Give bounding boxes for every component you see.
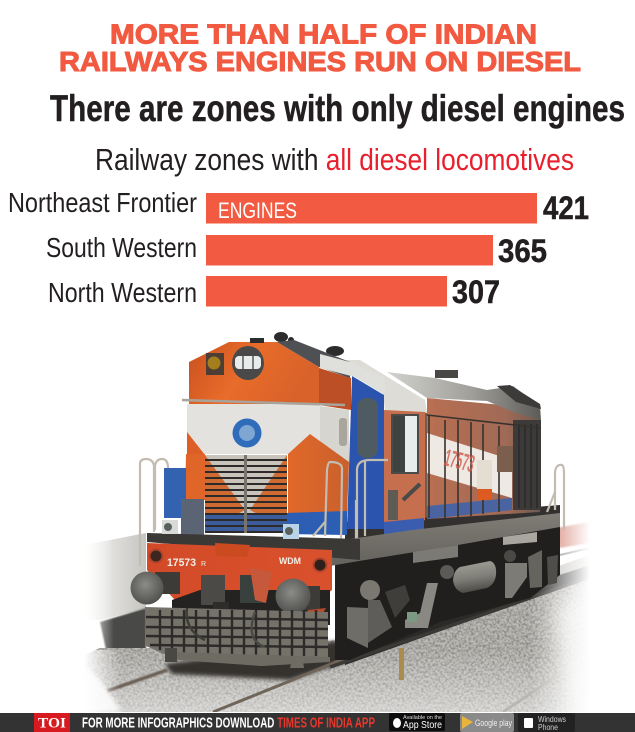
number plate text: 17573: [167, 557, 196, 569]
title: [59, 18, 581, 77]
locomotive: [130, 332, 564, 668]
icon: marker lights: [162, 520, 299, 539]
platform at left: [95, 533, 146, 620]
row: Northeast Frontier 421: ENGINES: [218, 198, 297, 223]
ground and tracks: [84, 520, 590, 712]
shadow under locomotive: [165, 640, 345, 680]
TOI logo: [34, 713, 70, 732]
icon: coupler: [172, 568, 330, 625]
row: Northeast Frontier 421: [8, 187, 589, 226]
icon: front deck: [147, 533, 360, 560]
row: South Western 365: [46, 232, 547, 269]
icon: underframe and bogies: [330, 513, 560, 660]
icon: fuel tank: [453, 561, 496, 593]
chart heading: Railway zones with all diesel locomotives: [95, 142, 574, 177]
icon: railway logo: [232, 418, 262, 448]
bar chart: railway zones: [8, 187, 589, 310]
Google Play badge: [460, 713, 514, 732]
Windows Phone badge: [518, 713, 575, 732]
edge fades: [530, 520, 590, 712]
icon: left buffer: [130, 572, 180, 604]
App Store badge: App Store: [403, 720, 442, 731]
roof fittings: [250, 332, 344, 356]
row: North Western 307: 307: [452, 274, 500, 310]
row: Northeast Frontier 421: 421: [543, 190, 589, 226]
icon: buffer beam: [147, 543, 332, 606]
row: North Western 307: North Western: [48, 277, 197, 308]
Windows Phone badge: Windows: [538, 715, 566, 724]
icon: short hood: [164, 332, 385, 535]
marker post: [399, 648, 404, 680]
distant wagon: [560, 523, 587, 549]
icon: headlight: [206, 346, 264, 380]
Windows Phone badge: Phone: [538, 723, 558, 732]
icon: cowcatcher: [145, 607, 330, 668]
icon: right buffer: [276, 578, 326, 622]
row: Northeast Frontier 421: Northeast Frontier: [8, 187, 197, 218]
ballast bed: [84, 555, 590, 712]
row: South Western 365: South Western: [46, 232, 197, 263]
row: South Western 365: 365: [498, 233, 547, 269]
footer bar: [0, 713, 635, 732]
title: MORE THAN HALF OF INDIAN: [110, 18, 537, 50]
number plate text: [167, 556, 301, 569]
TOI logo: TOI: [38, 716, 66, 732]
Google Play badge: Google play: [475, 718, 512, 729]
number plate text: R: [201, 561, 206, 568]
icon: handrails: [140, 459, 564, 590]
number plate text: WDM: [279, 556, 301, 566]
App Store badge: Available on the: [403, 715, 442, 721]
App Store badge: [389, 713, 445, 731]
footer message: FOR MORE INFOGRAPHICS DOWNLOAD TIMES OF INDIA APP: [82, 714, 375, 732]
row: North Western 307: [48, 274, 500, 310]
rails: [107, 670, 167, 691]
icon: long hood and radiator: 17573: [442, 445, 477, 478]
icon: cab with window: [347, 376, 425, 537]
icon: radiator grille: [205, 455, 287, 533]
blue hatch block: [181, 499, 204, 535]
icon: long hood and radiator: [340, 360, 560, 546]
title: RAILWAYS ENGINES RUN ON DIESEL: [59, 46, 581, 77]
